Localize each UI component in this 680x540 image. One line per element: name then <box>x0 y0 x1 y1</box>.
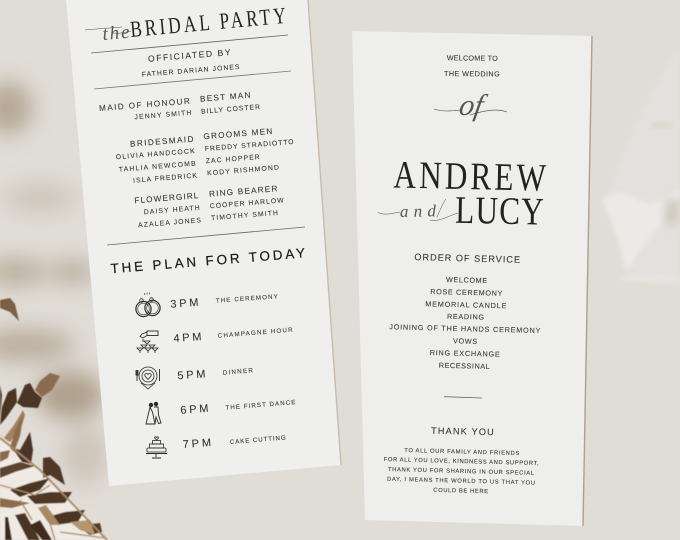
card content <box>378 53 547 495</box>
bridal party names: JENNY SMITH <box>134 110 192 121</box>
icon: wedding rings <box>136 292 160 317</box>
order of service list: READING <box>447 312 485 322</box>
script: of: of <box>457 88 490 122</box>
order of service list: RECESSINAL <box>439 361 490 371</box>
icon: first dance couple <box>146 402 161 424</box>
schedule times and events: 7PM <box>182 437 211 451</box>
card content <box>85 4 306 458</box>
order of service list: JOINING OF THE HANDS CEREMONY <box>389 322 541 335</box>
couple names: ANDREW <box>393 153 547 200</box>
schedule times and events: 6PM <box>180 403 209 417</box>
bridal party names: RING BEARER <box>209 184 278 199</box>
schedule times and events: THE FIRST DANCE <box>225 399 296 412</box>
order of service list: MEMORIAL CANDLE <box>425 299 507 310</box>
thank you message: FOR ALL YOU LOVE, KINDNESS AND SUPPORT, <box>384 457 539 467</box>
thank you message: THANK YOU FOR SHARING IN OUR SPECIAL <box>388 467 535 477</box>
bridal party names: TAHLIA NEWCOMB <box>119 161 196 174</box>
order of service list: RING EXCHANGE <box>430 348 500 359</box>
couple names <box>378 153 547 233</box>
icon: dinner plate <box>136 367 160 389</box>
card sheet <box>352 31 592 526</box>
card edge shadow <box>583 36 592 526</box>
bridal party names: DAISY HEATH <box>144 205 200 216</box>
bridal party names: ZAC HOPPER <box>206 154 260 165</box>
officiant block: OFFICIATED BY <box>148 47 231 64</box>
heading: the plan for today: THE PLAN FOR TODAY <box>110 245 306 276</box>
thank you message <box>384 448 539 495</box>
bridal party names: FLOWERGIRL <box>134 191 199 205</box>
icon: champagne tower <box>137 331 158 353</box>
panel: order of service card <box>352 31 592 526</box>
icon: wedding cake <box>146 437 167 458</box>
schedule times and events: CHAMPAGNE HOUR <box>218 327 293 340</box>
bridal party names <box>99 91 294 229</box>
thank you message: COULD BE HERE <box>433 488 488 495</box>
thank you message: DAY, I MEANS THE WORLD TO US THAT YOU <box>387 477 535 487</box>
bridal party names: AZALEA JONES <box>138 217 202 229</box>
heading: the bridal party: BRIDAL PARTY <box>129 4 287 43</box>
welcome lines <box>444 53 500 78</box>
couple names: LUCY <box>455 188 544 233</box>
bridal party names: GROOMS MEN <box>203 127 273 141</box>
bridal party names: ISLA FREDRICK <box>133 173 198 185</box>
schedule times and events: 3PM <box>170 297 199 311</box>
welcome lines: THE WEDDING <box>444 69 500 78</box>
bridal party names: MAID OF HONOUR <box>99 97 190 113</box>
officiant block: FATHER DARIAN JONES <box>142 64 240 79</box>
bridal party names: OLIVIA HANDCOCK <box>116 148 195 161</box>
card edge shadow <box>308 0 341 465</box>
order of service list: VOWS <box>453 336 477 346</box>
bridal party names: TIMOTHY SMITH <box>211 210 278 222</box>
bridal party names: COOPER HARLOW <box>210 197 284 210</box>
bridal party names: BRIDESMAID <box>130 135 194 149</box>
order of service heading: ORDER OF SERVICE <box>414 252 520 265</box>
bridal party names: BILLY COSTER <box>201 104 260 116</box>
dried fern leaves <box>0 298 107 540</box>
order of service list <box>389 275 541 371</box>
couple names: and <box>400 201 437 221</box>
thank you message: TO ALL OUR FAMILY AND FRIENDS <box>404 448 519 457</box>
bridal party names: FREDDY STRADIOTTO <box>205 139 294 153</box>
heading: the bridal party: the <box>102 22 130 45</box>
schedule times and events: THE CEREMONY <box>216 293 278 305</box>
order of service list: WELCOME <box>446 275 487 285</box>
panel: bridal party card <box>66 0 341 486</box>
order of service list: ROSE CEREMONY <box>430 287 503 298</box>
schedule times and events: CAKE CUTTING <box>230 435 286 446</box>
thank you heading: THANK YOU <box>431 426 494 437</box>
schedule times and events: DINNER <box>223 367 254 377</box>
bridal party names: BEST MAN <box>200 91 251 104</box>
bridal party names: KODY RISHMOND <box>207 165 279 177</box>
schedule times and events: 5PM <box>177 368 206 382</box>
officiant block <box>142 47 240 79</box>
fabric ribbon <box>602 45 680 285</box>
schedule times and events: 4PM <box>173 331 202 345</box>
welcome lines: WELCOME TO <box>447 53 498 63</box>
schedule times and events <box>170 293 296 451</box>
script: of <box>434 88 507 122</box>
card sheet <box>66 0 341 486</box>
